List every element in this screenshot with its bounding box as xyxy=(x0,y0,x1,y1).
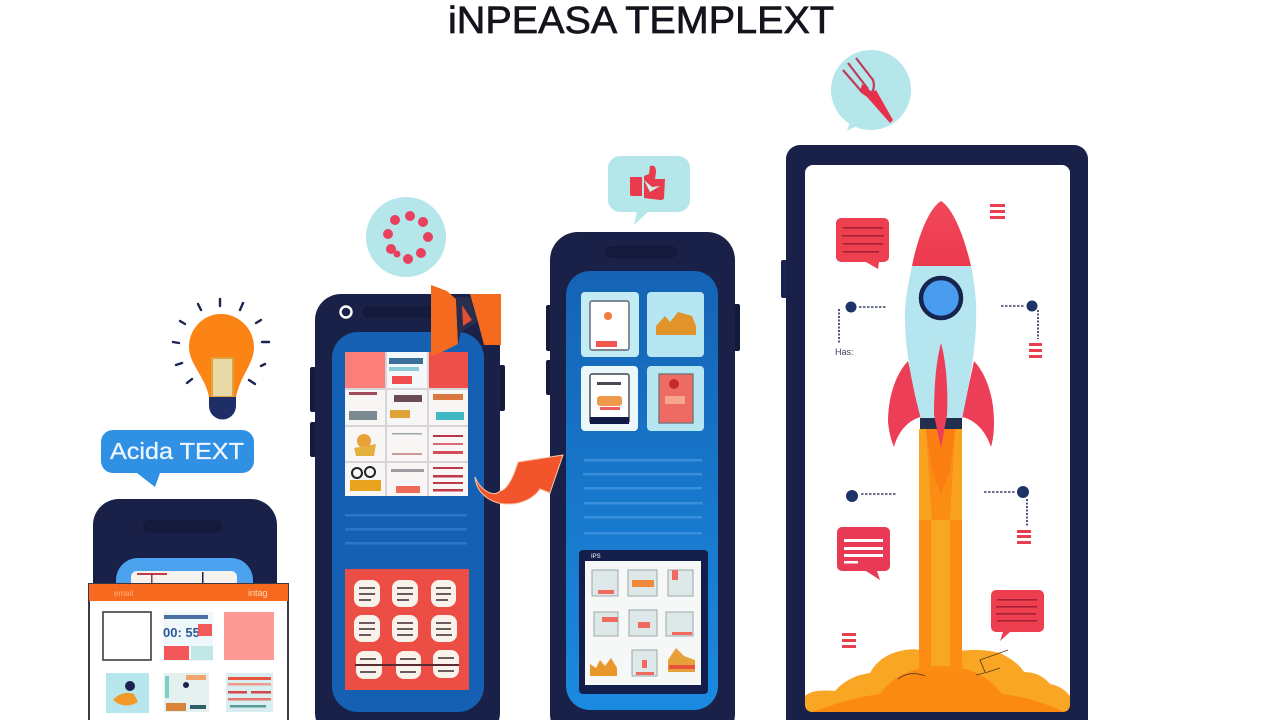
list icon right xyxy=(1029,343,1042,358)
rocket xyxy=(888,201,994,448)
connector top right xyxy=(1001,300,1038,339)
tile: sheet with logo xyxy=(581,292,639,357)
card thumbnail: list xyxy=(226,673,273,712)
phone 2 xyxy=(310,294,505,720)
list icon lower left xyxy=(842,633,856,648)
dark gallery panel: IPS xyxy=(591,554,601,560)
connector lower left xyxy=(846,490,897,502)
template grid xyxy=(345,352,468,496)
list icon lower right xyxy=(1017,530,1031,544)
panel: orange template card xyxy=(89,584,288,720)
card thumbnail: coupon: 00: 55 xyxy=(163,625,200,640)
panel: orange template card: intag xyxy=(248,588,268,598)
nose cone xyxy=(912,201,971,266)
camera xyxy=(340,306,352,318)
icon: orange ribbon xyxy=(431,285,501,356)
phone 3 screen xyxy=(566,271,718,710)
left fin xyxy=(888,361,921,447)
speech bubble mid left xyxy=(837,527,890,580)
card thumbnail: empty frame xyxy=(103,612,151,660)
connector top left: Has: xyxy=(835,347,854,357)
tile: bread xyxy=(647,292,704,357)
card thumbnail: food icon xyxy=(106,673,149,713)
icon: thumbs up bubble xyxy=(608,156,690,225)
window xyxy=(921,278,961,318)
list icon top xyxy=(990,204,1005,219)
red app panel xyxy=(345,569,469,690)
phone 3 xyxy=(546,232,740,720)
connector lower right xyxy=(984,486,1029,527)
card thumbnail: mixed layout xyxy=(164,673,209,712)
arrow xyxy=(475,455,563,504)
panel: orange template card: email xyxy=(114,589,133,598)
center fin xyxy=(934,343,947,448)
engine band xyxy=(920,418,962,429)
phone 4 screen xyxy=(805,165,1070,712)
title: iNPEASA TEMPLEXT xyxy=(448,0,834,42)
text placeholder lines xyxy=(345,514,467,544)
text placeholder lines xyxy=(583,459,703,534)
tile: poster with food xyxy=(581,366,638,431)
speech bubble top left xyxy=(836,218,889,269)
callout: blue speech bubble xyxy=(101,430,254,487)
icon: fork in circle xyxy=(831,50,911,131)
connector top left xyxy=(835,302,887,357)
card thumbnail: coupon xyxy=(163,612,213,661)
speech bubble lower right xyxy=(991,590,1044,641)
phone 4 xyxy=(781,145,1088,720)
icon: light bulb xyxy=(173,299,269,420)
card thumbnail: salmon block xyxy=(224,612,274,660)
icon: red ring in circle xyxy=(366,197,446,277)
callout: blue speech bubble: Acida TEXT xyxy=(110,438,244,464)
smoke cloud xyxy=(805,649,1070,712)
dark gallery panel xyxy=(579,550,708,694)
tile: red poster xyxy=(647,366,704,431)
phone 1 xyxy=(93,499,277,720)
rocket body xyxy=(905,266,976,419)
rocket flame xyxy=(919,429,962,672)
right fin xyxy=(962,361,994,447)
phone 2 screen xyxy=(332,332,484,712)
